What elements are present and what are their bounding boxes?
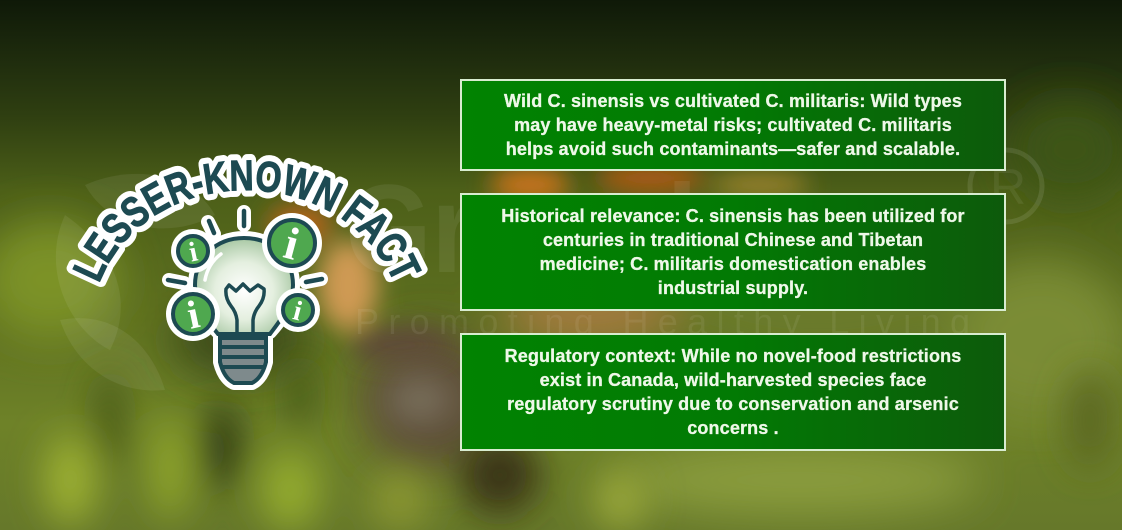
watermark wordmark: Promoting Healthy Living (355, 301, 970, 342)
card: historical relevance: industrial supply. (658, 278, 808, 298)
card: regulatory context (460, 333, 1006, 451)
watermark wordmark: Greenjeeva (345, 160, 946, 299)
card: historical relevance: medicine; C. militaris domestication enables (540, 254, 926, 274)
card: historical relevance: centuries in traditional Chinese and Tibetan (543, 230, 923, 250)
card: historical relevance: Historical relevance: C. sinensis has been utilized for (501, 206, 965, 226)
icon: info circles: i (279, 217, 305, 270)
card: regulatory context: exist in Canada, wild-harvested species face (540, 370, 926, 390)
icon: info circles: i (183, 291, 203, 338)
card: historical relevance (460, 193, 1006, 311)
card: regulatory context: regulatory scrutiny due to conservation and arsenic (507, 394, 959, 414)
card: wild vs cultivated (460, 79, 1006, 171)
icon: light bulb (166, 211, 322, 383)
card: wild vs cultivated: helps avoid such contaminants—safer and scalable. (506, 139, 960, 159)
card: regulatory context: Regulatory context: While no novel-food restrictions (505, 346, 961, 366)
watermark wordmark (56, 150, 1042, 391)
badge title curved text: LESSER-KNOWN FACT (66, 154, 428, 287)
card: wild vs cultivated: may have heavy-metal risks; cultivated C. militaris (514, 115, 952, 135)
icon: info circles: i (290, 295, 306, 327)
watermark wordmark: R (990, 159, 1026, 215)
badge title curved text: LESSER-KNOWN FACT (72, 160, 422, 282)
icon: info circles: i (186, 236, 201, 268)
card: regulatory context: concerns . (687, 418, 779, 438)
icon: info circles (166, 213, 322, 341)
card: wild vs cultivated: Wild C. sinensis vs cultivated C. militaris: Wild types (504, 91, 962, 111)
